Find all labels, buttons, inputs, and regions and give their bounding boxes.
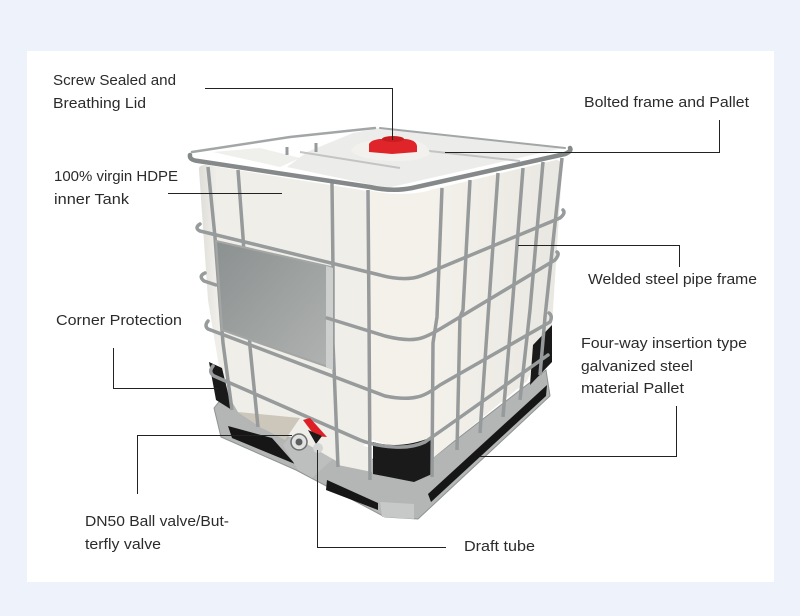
callout: ball or butterfly valve: DN50 Ball valve/But- (85, 513, 229, 530)
callout: corner protection: Corner Protection (56, 312, 182, 329)
callout: screw sealed and breathing lid: Breathing Lid (53, 95, 146, 112)
metal label plate (216, 241, 333, 370)
callout: four-way insertion pallet: material Pallet (581, 380, 685, 397)
tank body (199, 160, 562, 472)
callout: welded steel pipe frame (518, 246, 757, 288)
callout: four-way insertion pallet: Four-way insertion type (581, 335, 747, 352)
IBC tank illustration (190, 128, 570, 519)
callout: four-way insertion pallet: galvanized steel (581, 358, 693, 375)
horizontal frame rails (197, 210, 564, 447)
callout: draft tube (318, 450, 535, 555)
tank top (213, 128, 563, 188)
ball valve (291, 418, 327, 453)
vertical frame bars (208, 143, 562, 480)
callout: HDPE inner tank (54, 168, 282, 208)
callout: corner protection (56, 312, 218, 388)
callout: ball or butterfly valve (85, 436, 292, 553)
callout: four-way insertion pallet (480, 335, 747, 456)
top rim frame (190, 128, 570, 190)
callout: screw sealed and breathing lid (53, 72, 392, 140)
callout: bolted frame and pallet (445, 94, 750, 152)
callout: screw sealed and breathing lid: Screw Sealed and (53, 72, 176, 89)
pallet (214, 370, 550, 519)
callout: ball or butterfly valve: terfly valve (85, 536, 161, 553)
callout: draft tube: Draft tube (464, 538, 535, 555)
callout: welded steel pipe frame: Welded steel pipe frame (588, 271, 757, 288)
black lower tank bands (209, 325, 552, 482)
callout: HDPE inner tank: inner Tank (54, 191, 130, 208)
red screw lid (351, 136, 430, 161)
callout: HDPE inner tank: 100% virgin HDPE (54, 168, 178, 185)
callout: bolted frame and pallet: Bolted frame and Pallet (584, 94, 750, 111)
